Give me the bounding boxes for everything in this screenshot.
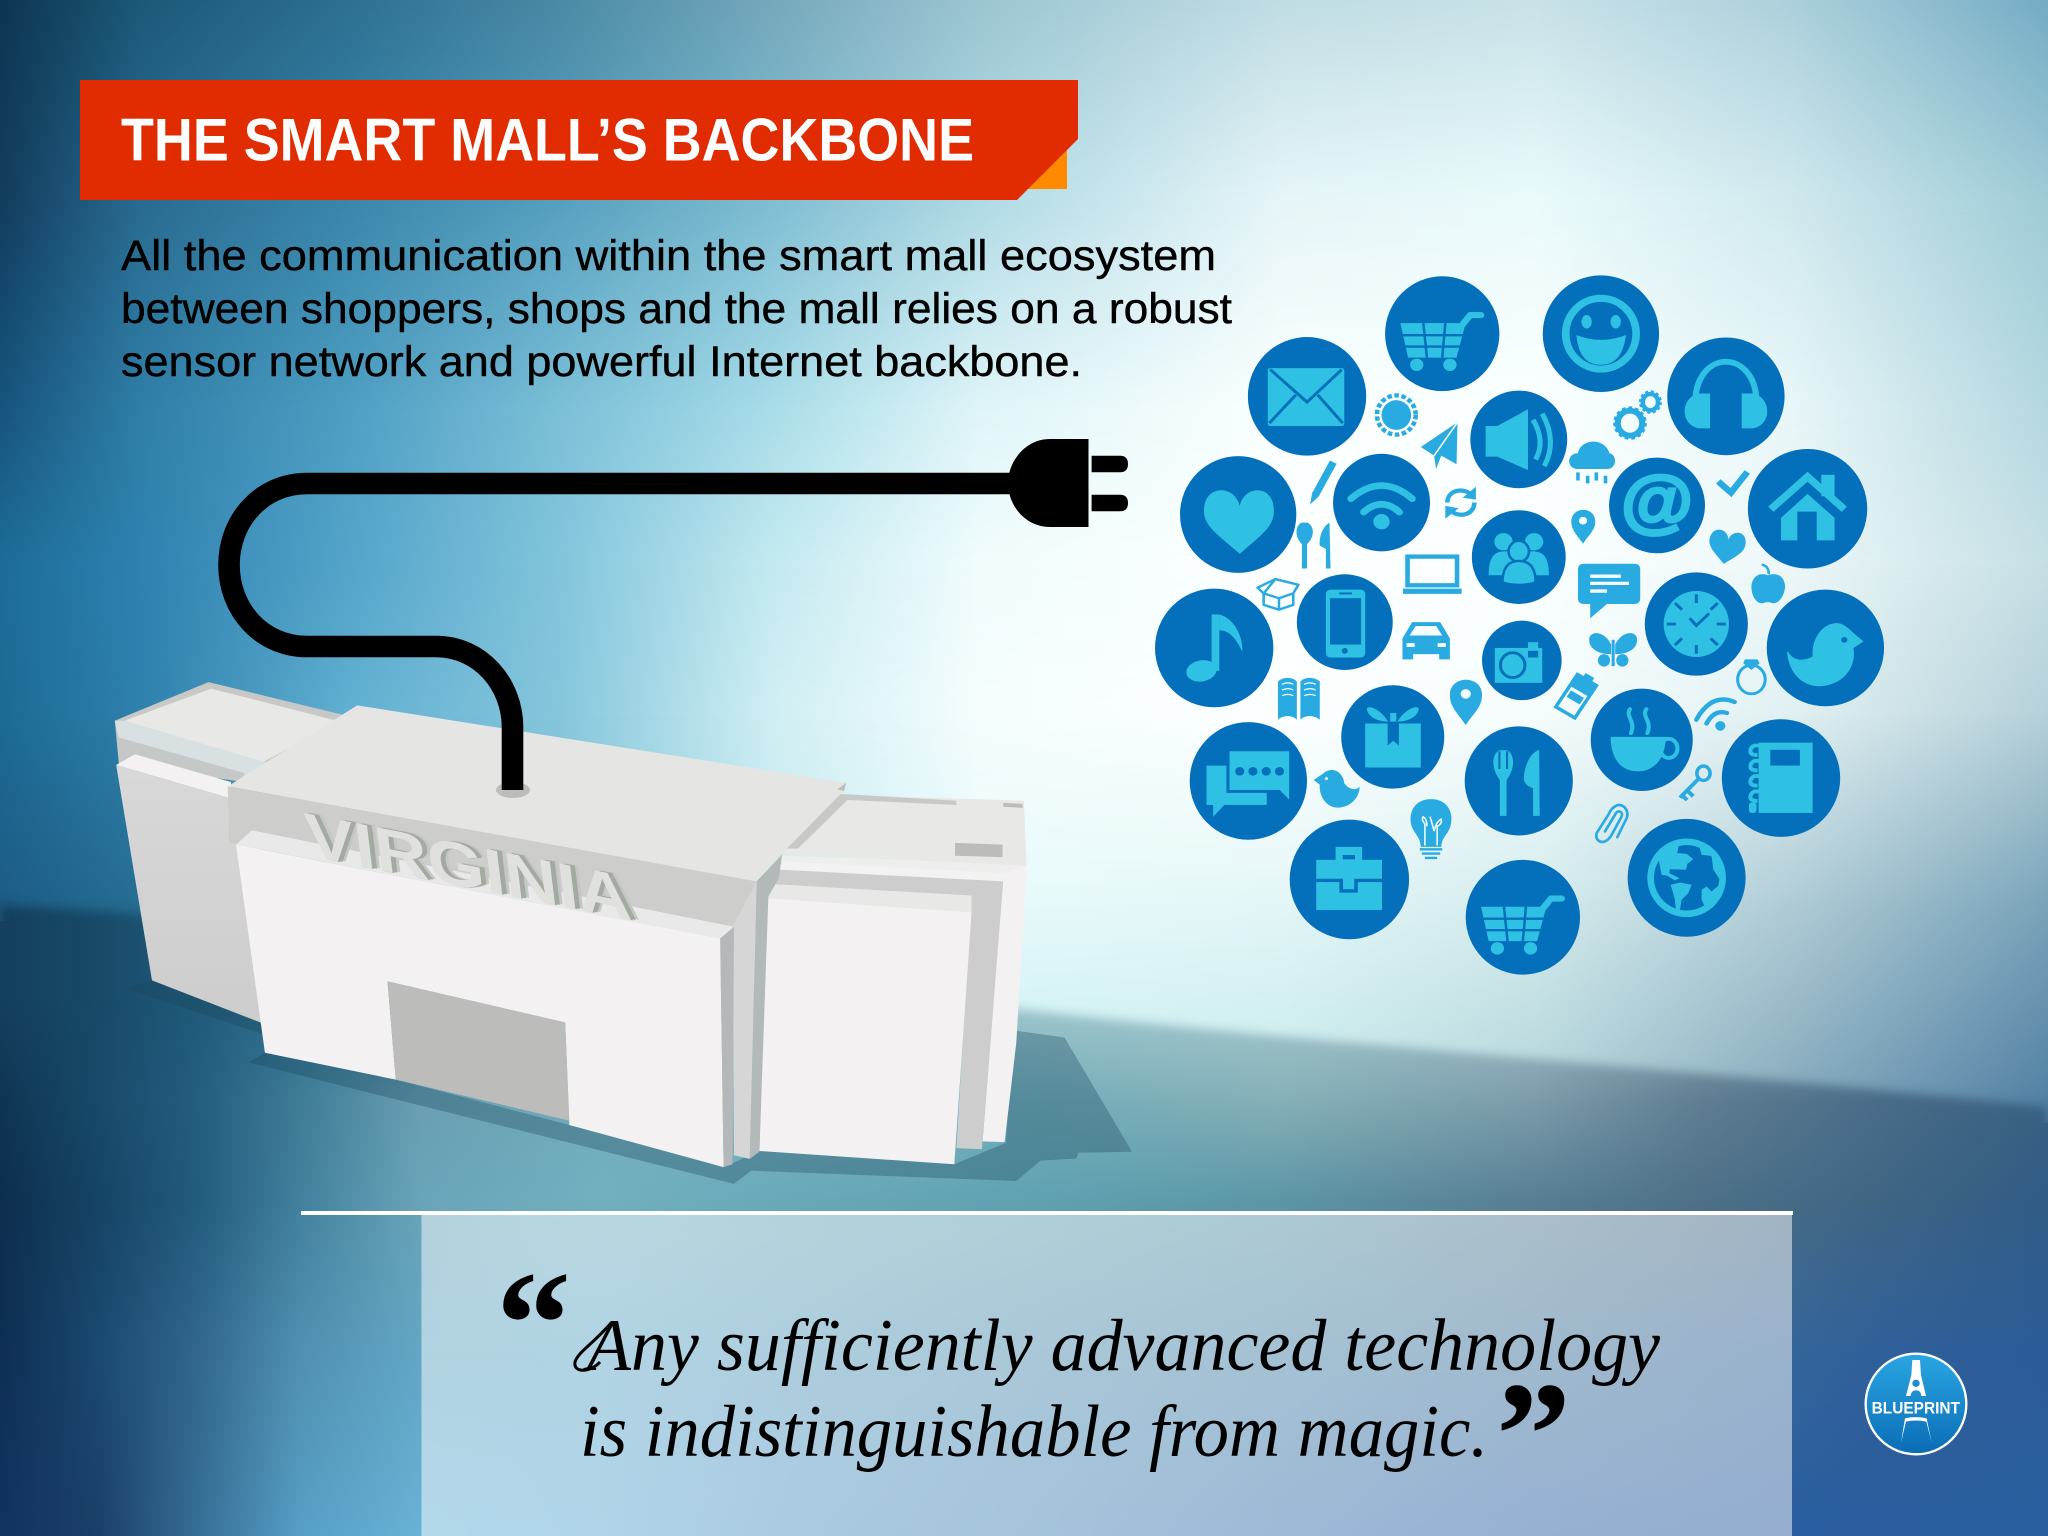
- icon: headphones: [1667, 338, 1785, 455]
- icon: gears: [1615, 392, 1661, 438]
- icon: heart: [1180, 456, 1296, 573]
- plug prongs: [1092, 456, 1128, 511]
- icon: wifi: [1333, 454, 1430, 551]
- icon: ring: [1738, 659, 1765, 694]
- building shadow: [126, 980, 1132, 1184]
- icon: house: [1748, 449, 1867, 569]
- cable: [229, 484, 1015, 790]
- quote text: is indistinguishable from magic.: [580, 1391, 1488, 1473]
- main block: [228, 705, 956, 1159]
- icon: open book: [1278, 678, 1320, 720]
- compass legs: [1901, 1417, 1932, 1443]
- icon: camera: [1482, 621, 1562, 700]
- icon: message bubble: [1578, 564, 1640, 618]
- title: THE SMART MALL’S BACKBONE: [121, 106, 974, 174]
- icon: small fork and knife: [1297, 523, 1331, 569]
- icon: smiley: [1543, 275, 1659, 392]
- icon: open box: [1258, 579, 1298, 610]
- icon: gift box: [1341, 685, 1444, 789]
- intro text: sensor network and powerful Internet backbone.: [121, 338, 1082, 386]
- icon: shopping cart: [1466, 860, 1580, 975]
- sign: VIRGINIA: VIRGINIA: [303, 799, 637, 935]
- icon: bird: [1767, 590, 1884, 706]
- icon: notebook: [1722, 719, 1840, 837]
- icon: music note: [1155, 589, 1273, 707]
- icon: small wifi: [1696, 700, 1735, 731]
- icon: at sign: @: [1620, 464, 1692, 541]
- icon: paper plane: [1421, 422, 1458, 469]
- icon: chat bubbles: [1190, 722, 1307, 840]
- closing quote mark: ”: [1496, 1352, 1571, 1518]
- front entrance wall: [236, 830, 734, 1167]
- quote text: [580, 1305, 1660, 1473]
- icon: envelope: [1248, 337, 1366, 456]
- icon: at sign: [1609, 458, 1705, 553]
- icon: speaker: [1470, 391, 1567, 488]
- sign: VIRGINIA: VIRGINIA: [301, 799, 635, 934]
- icon: paperclip: [1596, 805, 1627, 842]
- icon: clock: [1645, 572, 1748, 676]
- sign: VIRGINIA: VIRGINIA: [309, 798, 642, 934]
- icon: location pin: [1571, 510, 1595, 544]
- intro text: between shoppers, shops and the mall relies on a robust: [121, 285, 1232, 333]
- sign: VIRGINIA: VIRGINIA: [306, 799, 640, 934]
- plug body: [1008, 439, 1088, 527]
- icon: sun: [1377, 395, 1416, 435]
- quote text: Any sufficiently advanced technology: [582, 1305, 1660, 1387]
- left wing: [115, 682, 348, 1023]
- icon: globe: [1628, 819, 1746, 937]
- icon: apple: [1751, 565, 1785, 603]
- icon: check mark: [1718, 472, 1747, 492]
- icon: pencil: [1310, 460, 1337, 504]
- icon: small heart: [1705, 528, 1747, 567]
- icon: shopping cart: [1385, 276, 1499, 391]
- icon: smartphone: [1297, 574, 1393, 670]
- socket hole: [496, 782, 530, 798]
- icon: coffee cup: [1591, 689, 1693, 791]
- intro text: All the communication within the smart mall ecosystem: [121, 232, 1216, 280]
- banner red shape: [80, 80, 1078, 200]
- compass top: [1906, 1360, 1926, 1396]
- rule above quote: [301, 1211, 1793, 1215]
- title banner: [80, 80, 1078, 200]
- icon: fork and knife: [1465, 726, 1573, 835]
- icon: rain cloud: [1569, 442, 1615, 483]
- icon: butterfly: [1589, 633, 1637, 667]
- icon: location pin: [1450, 680, 1482, 725]
- banner orange corner: [1020, 150, 1067, 189]
- intro text: [121, 232, 1232, 386]
- icon: battery: [1556, 670, 1599, 718]
- icon: people: [1472, 510, 1566, 604]
- wordmark: BLUEPRINT: [1872, 1399, 1960, 1417]
- icon: key: [1680, 766, 1710, 800]
- icon cluster: [1155, 275, 1884, 975]
- power cable and plug: [229, 439, 1128, 798]
- icon: car: [1402, 622, 1450, 659]
- logo: Blueprint: [1866, 1354, 1966, 1454]
- icon: laptop: [1403, 557, 1462, 594]
- icon: light bulb: [1411, 799, 1451, 858]
- quote panel: [422, 1215, 1792, 1536]
- icon: small bird: [1314, 770, 1360, 808]
- panel background: [422, 1215, 1792, 1536]
- opening quote mark: “: [496, 1241, 571, 1407]
- icon: sync arrows: [1445, 487, 1476, 519]
- mall building: [115, 682, 1132, 1184]
- icon: briefcase: [1290, 820, 1409, 939]
- right wing: [759, 795, 1027, 1164]
- quote swash: [575, 1322, 612, 1370]
